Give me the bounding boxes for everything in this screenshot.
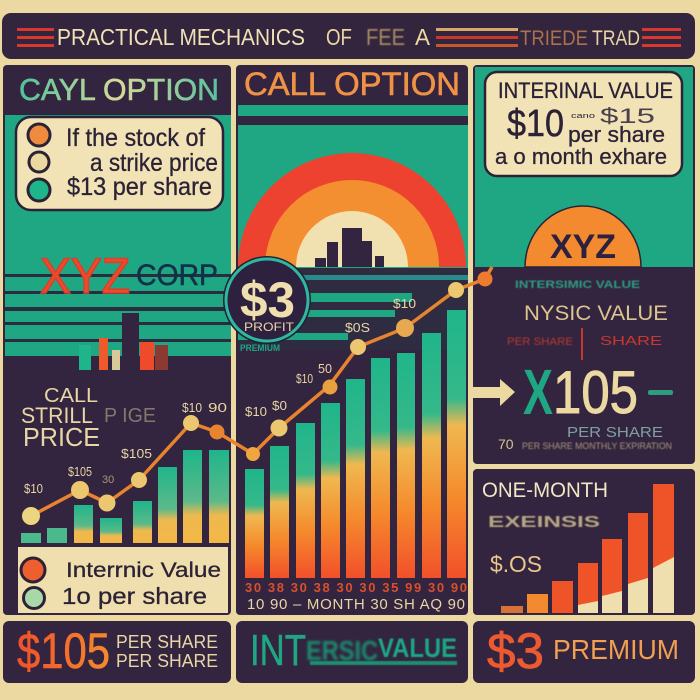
panel: right bottom: [473, 469, 695, 615]
callout line 1: If the stock of: [66, 124, 205, 152]
big value: $10: [507, 103, 564, 145]
axis labels: 10 90 – MONTH 30 SH AQ 90: [247, 596, 465, 613]
data labels: $105: [68, 464, 92, 479]
arrow: [469, 379, 515, 406]
panel: middle column: [236, 65, 468, 615]
bullet green: [28, 179, 50, 201]
footer: $105: [3, 621, 231, 683]
data labels: $10: [24, 481, 43, 496]
title banner: [2, 13, 695, 59]
bar chart: left: [21, 450, 229, 543]
legend swatch green: [24, 588, 44, 608]
line chart: price path: [22, 267, 492, 525]
callout: stock: [16, 117, 223, 210]
value 15: $15: [600, 105, 655, 128]
data labels: $0: [272, 398, 287, 413]
blurred title word: FEE: [366, 24, 405, 50]
data labels: 90: [208, 400, 227, 415]
red share line: [507, 328, 662, 360]
title word of: OF: [326, 24, 352, 50]
legend: [18, 547, 228, 613]
big value $105: X: [523, 356, 553, 428]
panel: right top: [473, 65, 695, 464]
bullet orange: [28, 124, 50, 146]
footer: $105: PER SHARE: [116, 651, 218, 671]
bar chart: right: [501, 484, 674, 613]
bullet cream: [29, 152, 49, 172]
data labels: $0S: [345, 320, 370, 335]
panel: left column: [3, 65, 231, 615]
label: call strike price: P IGE: [104, 405, 156, 427]
profit badge: [223, 256, 311, 344]
month line: a o month exhare: [495, 144, 667, 169]
footer: intrinsic value: VALUE: [378, 633, 457, 663]
title trad text: TRAD: [592, 27, 640, 50]
panel heading: CAYL OPTION: [19, 72, 219, 107]
title left stripes: [17, 28, 54, 47]
label: call strike price: STRILL: [21, 403, 93, 428]
title trade text: TRIEDE: [520, 27, 588, 50]
footer: $105: $105: [17, 623, 110, 679]
bar chart: middle: [245, 310, 466, 578]
legend line 2: 1o per share: [62, 583, 207, 609]
badge value: $3: [240, 272, 295, 328]
logo CORP: CORP: [136, 259, 218, 292]
title right stripes: [642, 28, 681, 47]
footer: intrinsic value: INT: [250, 626, 306, 675]
value label: $.OS: [490, 551, 542, 577]
sun XYZ: [525, 206, 641, 267]
data labels: $10: [393, 296, 416, 311]
callout line 3: $13 per share: [67, 173, 212, 201]
footer: premium: $3: [487, 623, 544, 679]
footer: $105: PER SHARE: [116, 632, 218, 652]
legend line 1: Interrnic Value: [66, 559, 221, 582]
footer: intrinsic value: ERSIC: [306, 635, 378, 666]
data labels: [24, 296, 416, 496]
blurred label: EXEINSIS: [488, 514, 600, 531]
heading: ONE-MONTH: [482, 479, 608, 502]
axis labels: [245, 580, 467, 613]
per share: per share: [568, 122, 665, 147]
footer: premium: PREMIUM: [553, 634, 679, 665]
callout: intrinsic value: [485, 72, 682, 176]
badge label: PROFIT: [244, 320, 295, 334]
data labels: $105: [121, 446, 152, 461]
big value $105: [523, 356, 673, 428]
blurred label: INTERSIMIC VALUE: [515, 279, 640, 291]
footer: intrinsic value: [236, 621, 468, 683]
label: call strike price: CALL: [44, 385, 98, 407]
data labels: $10: [245, 404, 267, 419]
line 1: INTERINAL VALUE: [498, 78, 673, 103]
title word a: A: [415, 24, 431, 50]
city skyline: [315, 228, 384, 267]
title mid stripes: [436, 28, 518, 47]
logo XYZ: XYZ: [40, 248, 130, 304]
green strip: [238, 105, 468, 116]
premium tag: PREMIUM: [240, 343, 280, 353]
footnote: PER SHARE MONTHLY EXPIRATION: [522, 441, 672, 451]
red share line: PER SHARE: [507, 336, 573, 348]
footnote: 70: [498, 436, 514, 452]
scene stripes: [5, 274, 231, 342]
data labels: 50: [318, 361, 332, 376]
red share line: SHARE: [600, 333, 662, 348]
green scene: [5, 115, 231, 356]
heading: CALL OPTION: [244, 66, 460, 102]
callout line 2: a strike price: [90, 149, 218, 177]
data points: [22, 272, 492, 525]
data labels: $10: [182, 400, 202, 415]
label: call strike price: [21, 385, 156, 452]
title text: PRACTICAL MECHANICS: [57, 24, 305, 50]
data labels: 30: [102, 474, 114, 486]
per share label: PER SHARE: [567, 425, 663, 441]
heading: nysic value: NYSIC VALUE: [524, 302, 668, 325]
sun XYZ: XYZ: [550, 228, 616, 266]
big value $105: 105: [553, 359, 638, 426]
sky: [238, 125, 468, 268]
data labels: $10: [296, 371, 313, 386]
green area: [475, 67, 693, 267]
label: call strike price: PRICE: [23, 422, 100, 452]
axis labels: 30 38 30 38 30 30 35 99 30 90: [245, 580, 467, 595]
footnote: [498, 436, 672, 452]
footer: premium: [473, 621, 695, 683]
stripes under sun: [238, 268, 468, 350]
sun rings: [238, 153, 466, 267]
small word: cano: [571, 113, 595, 120]
skyline: [79, 313, 168, 370]
legend swatch orange: [21, 558, 45, 582]
